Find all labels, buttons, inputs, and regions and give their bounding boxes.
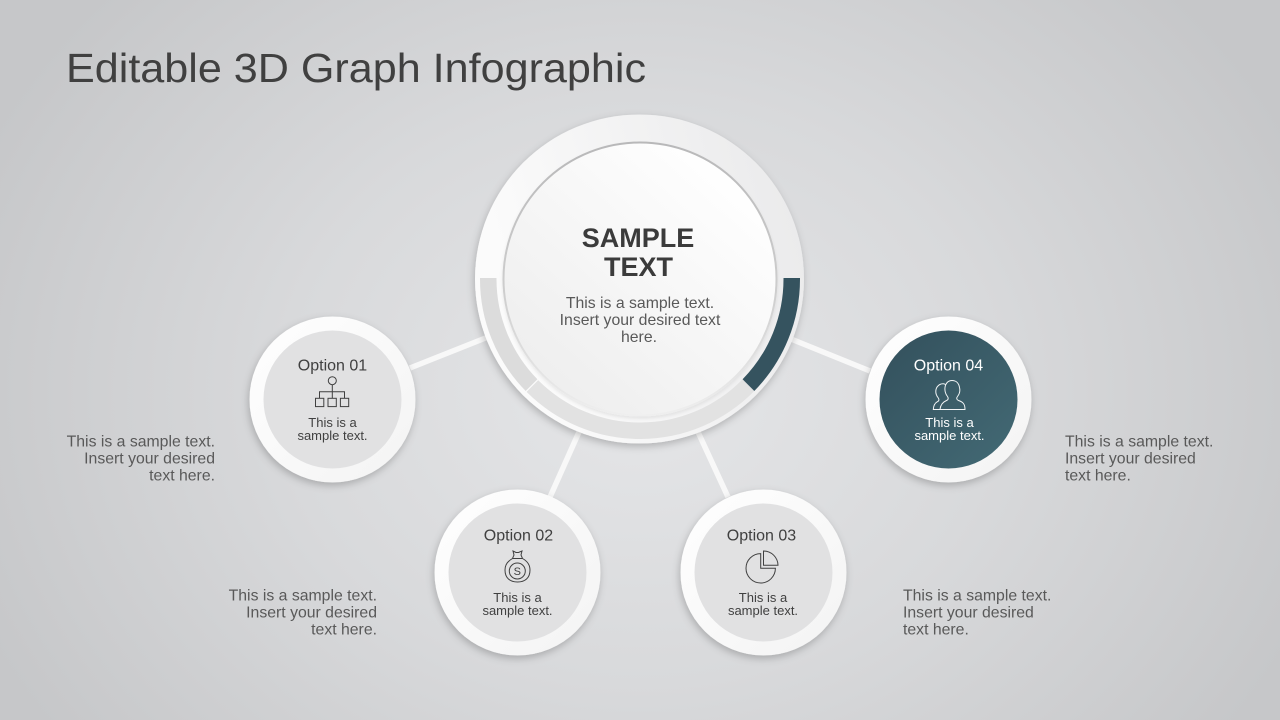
icon: two people: [933, 380, 965, 410]
hub grey ring bottom segment: [527, 379, 754, 439]
option 01 text: sample text.: [297, 428, 368, 443]
option 04 label: Option 04: [914, 358, 983, 374]
hub heading: SAMPLE: [582, 223, 694, 253]
icon: money bag: S: [514, 566, 521, 578]
central hub: [475, 114, 804, 444]
caption: option 04: This is a sample text.: [1065, 434, 1213, 450]
option 04 ring: [866, 316, 1032, 482]
option 04 text: sample text.: [914, 428, 985, 443]
option 02 text: This is a: [493, 590, 542, 605]
option 01 label: Option 01: [298, 358, 367, 374]
caption: option 01: text here.: [149, 468, 215, 484]
option 02 label: Option 02: [484, 528, 553, 544]
option 01 inner disc: [264, 330, 402, 468]
option 04 inner disc: [880, 330, 1018, 468]
icon: money bag: [505, 551, 530, 582]
option 04 text: This is a: [925, 415, 974, 430]
option 03 inner disc: [694, 504, 832, 642]
caption: option 03: text here.: [903, 622, 969, 638]
hub outer disc: [475, 114, 804, 444]
hub heading: TEXT: [604, 252, 674, 282]
option 02 inner disc: [448, 504, 586, 642]
caption: option 01: This is a sample text.: [67, 434, 215, 450]
option 03 ring: [680, 490, 846, 656]
hub grey ring left segment: [480, 278, 537, 391]
option 02 ring: [434, 490, 600, 656]
caption: option 03: Insert your desired: [903, 604, 1034, 622]
node: option 03: [680, 490, 846, 656]
caption: option 02: This is a sample text.: [229, 588, 377, 604]
option 03 label: Option 03: [727, 528, 796, 544]
hub teal ring segment: [743, 278, 800, 391]
node: option 04: [866, 316, 1032, 482]
caption: option 02: text here.: [311, 622, 377, 638]
option 03 text: sample text.: [728, 603, 798, 618]
caption: option 01: Insert your desired: [84, 450, 215, 468]
node: option 01: [250, 316, 416, 482]
caption: option 04: Insert your desired: [1065, 450, 1196, 468]
option 03 text: This is a: [739, 590, 787, 605]
icon: pie chart: [746, 551, 778, 583]
hub body text: This is a sample text.: [566, 295, 714, 312]
connector lines: [410, 337, 870, 497]
caption: option 04: text here.: [1065, 468, 1131, 484]
hub inner disc: [504, 142, 776, 416]
hub body text: Insert your desired text: [560, 312, 721, 329]
hub body text: here.: [621, 329, 657, 346]
title: Editable 3D Graph Infographic: [66, 45, 646, 91]
node: option 02: [434, 490, 600, 656]
option 02 text: sample text.: [482, 603, 553, 618]
option 01 text: This is a: [308, 415, 357, 430]
option 01 ring: [250, 316, 416, 482]
caption: option 02: Insert your desired: [246, 604, 377, 622]
icon: org chart: [316, 377, 349, 407]
caption: option 03: This is a sample text.: [903, 588, 1051, 604]
